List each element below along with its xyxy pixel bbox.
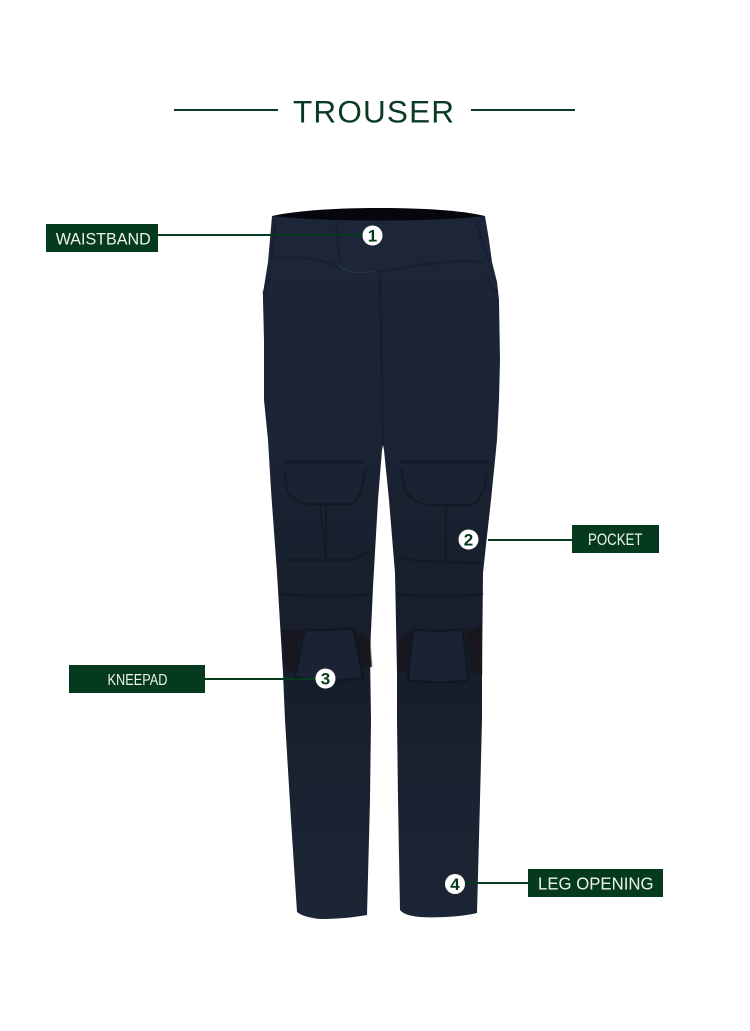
- callout: leg opening: 4: [450, 875, 460, 894]
- callout: leg opening: [445, 869, 663, 897]
- callout: kneepad: [69, 665, 336, 693]
- callout: pocket: 2: [464, 530, 473, 550]
- trousers illustration: [263, 208, 500, 919]
- callout: leg opening: LEG OPENING: [538, 874, 654, 894]
- callout: waistband: WAISTBAND: [56, 230, 151, 248]
- kneepads: [282, 626, 482, 685]
- trousers body: [263, 216, 500, 919]
- callout: pocket: POCKET: [588, 531, 642, 549]
- waistband details: [263, 220, 497, 445]
- waist opening: [272, 208, 485, 222]
- callout: kneepad: KNEEPAD: [108, 672, 168, 689]
- belt tab: [339, 265, 376, 273]
- cargo pockets: [281, 462, 488, 596]
- callout: waistband: [46, 224, 382, 252]
- callout: waistband: 1: [368, 226, 377, 246]
- title: TROUSER: [293, 93, 454, 129]
- callout: pocket: [458, 525, 659, 553]
- callout: kneepad: 3: [321, 670, 330, 688]
